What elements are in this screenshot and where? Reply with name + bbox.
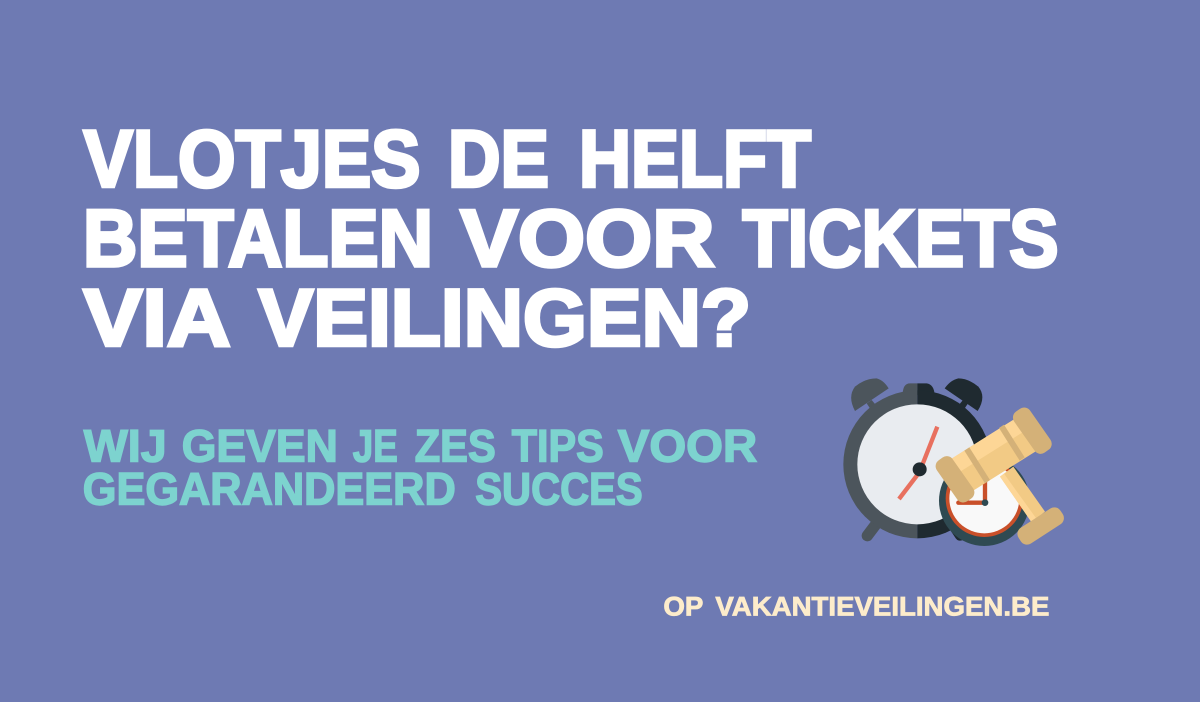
title: VLOTJES <box>84 114 420 204</box>
title <box>83 114 1058 364</box>
subtitle: ZES <box>415 420 496 472</box>
title: VEILINGEN? <box>258 274 751 364</box>
subtitle: VOOR <box>618 420 757 472</box>
subtitle: TIPS <box>512 420 604 472</box>
call to action: website: OP <box>663 592 703 622</box>
icon: alarm clock with gavel <box>843 378 1067 547</box>
subtitle: WIJ <box>84 420 167 472</box>
icon: gavel <box>933 405 1067 547</box>
subtitle <box>83 420 757 514</box>
icon: small clock <box>939 455 1030 546</box>
title: TICKETS <box>742 194 1058 284</box>
title: VOOR <box>460 194 714 284</box>
subtitle: JE <box>353 420 398 472</box>
subtitle: SUCCES <box>475 464 643 514</box>
subtitle: GEGARANDEERD <box>83 464 456 514</box>
icon: alarm clock <box>843 378 991 538</box>
subtitle: GEVEN <box>182 420 338 472</box>
title: BETALEN <box>83 194 433 284</box>
title: DE <box>448 114 549 204</box>
title: HELFT <box>579 114 811 204</box>
call to action: website: VAKANTIEVEILINGEN.BE <box>715 592 1049 622</box>
title: VIA <box>84 274 230 364</box>
